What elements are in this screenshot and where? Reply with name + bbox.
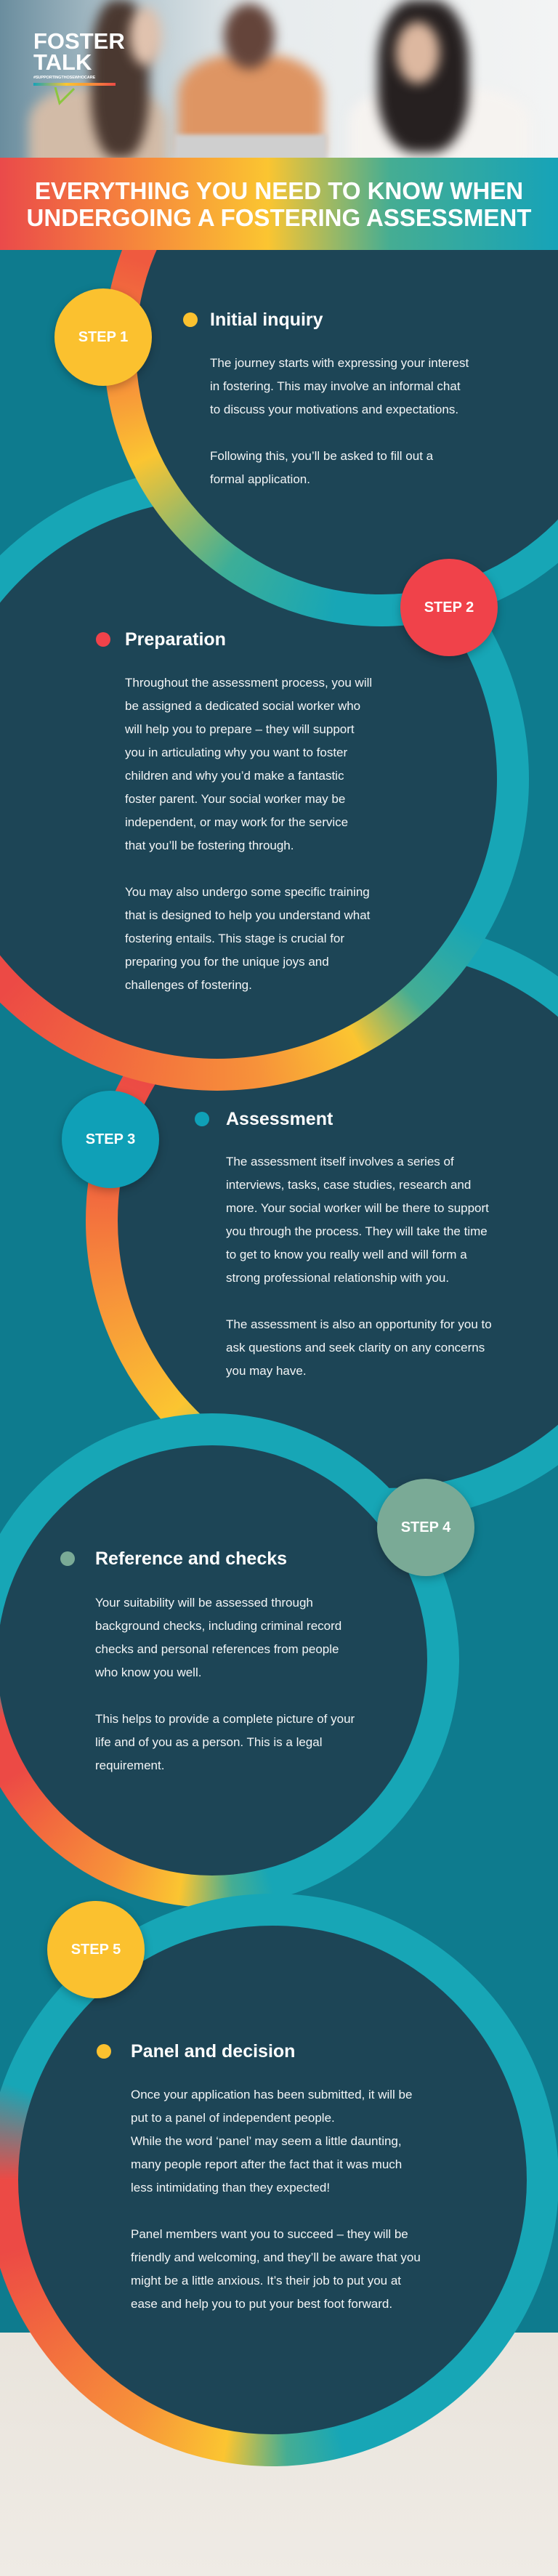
step 1 dot: [183, 312, 198, 327]
step 3 text: [226, 1155, 492, 1378]
step 2 text: children and why you’d make a fantastic: [125, 769, 344, 783]
step 4 text: [95, 1596, 355, 1772]
title: UNDERGOING A FOSTERING ASSESSMENT: [27, 203, 531, 231]
panel: step 1 circle: [104, 71, 558, 626]
step 2 text: [125, 676, 372, 992]
step 5 text: [131, 2088, 421, 2311]
step 3 text: you may have.: [226, 1364, 307, 1378]
step 5 badge: [47, 1901, 145, 1998]
step 3 text: The assessment is also an opportunity for you to: [226, 1317, 492, 1331]
step 5 text: many people report after the fact that it was much: [131, 2157, 402, 2171]
step 5 text: ease and help you to put your best foot forward.: [131, 2297, 392, 2311]
step 3 text: The assessment itself involves a series of: [226, 1155, 454, 1168]
header photo: [0, 0, 558, 158]
step 3 dot: [195, 1112, 209, 1126]
step 5 text: While the word ‘panel’ may seem a little daunting,: [131, 2134, 402, 2148]
step 3 heading: Assessment: [226, 1109, 333, 1129]
logo: Foster Talk: #SUPPORTINGTHOSEWHOCARE: [33, 76, 95, 80]
logo: Foster Talk: FOSTER: [33, 28, 125, 54]
step 4 text: requirement.: [95, 1759, 164, 1772]
step 2 text: foster parent. Your social worker may be: [125, 792, 345, 806]
step 2 text: be assigned a dedicated social worker who: [125, 699, 360, 713]
step 5 text: friendly and welcoming, and they’ll be aware that you: [131, 2250, 421, 2264]
step 2 heading: Preparation: [125, 629, 226, 650]
step 1 text: Following this, you’ll be asked to fill out a: [210, 449, 433, 463]
step 1 badge: STEP 1: [78, 328, 128, 344]
step 3 text: you through the process. They will take the time: [226, 1224, 488, 1238]
step 5 text: might be a little anxious. It’s their job to put you at: [131, 2274, 401, 2288]
step 2 text: you in articulating why you want to foster: [125, 746, 347, 759]
step 4 text: life and of you as a person. This is a legal: [95, 1735, 322, 1749]
step 3 text: interviews, tasks, case studies, research and: [226, 1178, 471, 1192]
step 4 dot: [60, 1551, 75, 1566]
title: [27, 177, 532, 231]
step 2 text: You may also undergo some specific training: [125, 885, 370, 899]
step 4 text: checks and personal references from people: [95, 1642, 339, 1656]
step 5 text: Once your application has been submitted, it will be: [131, 2088, 412, 2101]
panel: step 2 circle: [0, 467, 529, 1091]
step 3 badge: [62, 1091, 159, 1188]
step 5 dot: [97, 2044, 111, 2059]
step 4 badge: [377, 1479, 474, 1576]
step 1 badge: [54, 288, 152, 386]
bottom faded photo background: [0, 2333, 558, 2576]
step 5 text: less intimidating than they expected!: [131, 2181, 330, 2195]
title: EVERYTHING YOU NEED TO KNOW WHEN: [35, 177, 523, 203]
step 4 text: background checks, including criminal record: [95, 1619, 341, 1633]
step 2 text: preparing you for the unique joys and: [125, 955, 329, 969]
step 5 badge: STEP 5: [71, 1942, 121, 1958]
step 2 badge: STEP 2: [424, 599, 474, 615]
logo: Foster Talk: TALK: [33, 49, 92, 75]
step 1 text: formal application.: [210, 472, 310, 486]
step 2 text: will help you to prepare – they will support: [125, 722, 355, 736]
step 2 text: independent, or may work for the service: [125, 815, 348, 829]
panel: step 4 circle: [0, 1413, 459, 1907]
step 5 text: put to a panel of independent people.: [131, 2111, 335, 2125]
step 2 text: that you’ll be fostering through.: [125, 839, 294, 852]
step 1 text: [210, 356, 469, 486]
step 1 text: to discuss your motivations and expectations.: [210, 403, 458, 416]
panel: step 3 circle: [86, 921, 558, 1520]
step 1 text: The journey starts with expressing your interest: [210, 356, 469, 370]
step 4 text: This helps to provide a complete picture of your: [95, 1712, 355, 1726]
step 4 badge: STEP 4: [401, 1519, 450, 1535]
step 3 text: to get to know you really well and will form a: [226, 1248, 467, 1261]
step 3 text: more. Your social worker will be there to support: [226, 1201, 489, 1215]
step 2 text: challenges of fostering.: [125, 978, 252, 992]
step 3 badge: STEP 3: [86, 1131, 135, 1147]
title banner: [0, 158, 558, 250]
step 1 text: in fostering. This may involve an informal chat: [210, 379, 461, 393]
step 4 heading: Reference and checks: [95, 1549, 287, 1569]
step 2 text: Throughout the assessment process, you will: [125, 676, 372, 690]
step 2 text: that is designed to help you understand what: [125, 908, 370, 922]
step 3 text: strong professional relationship with you.: [226, 1271, 449, 1285]
step 2 dot: [96, 632, 110, 647]
step 2 text: fostering entails. This stage is crucial for: [125, 932, 344, 945]
panel: step 5 circle: [0, 1894, 558, 2466]
step 5 text: Panel members want you to succeed – they will be: [131, 2227, 408, 2241]
step 4 text: who know you well.: [95, 1665, 201, 1679]
step 2 badge: [400, 559, 498, 656]
step 3 text: ask questions and seek clarity on any concerns: [226, 1341, 485, 1354]
step 1 heading: Initial inquiry: [210, 310, 323, 330]
step 5 heading: Panel and decision: [131, 2041, 295, 2062]
step 4 text: Your suitability will be assessed through: [95, 1596, 313, 1610]
logo: Foster Talk: [33, 28, 125, 105]
